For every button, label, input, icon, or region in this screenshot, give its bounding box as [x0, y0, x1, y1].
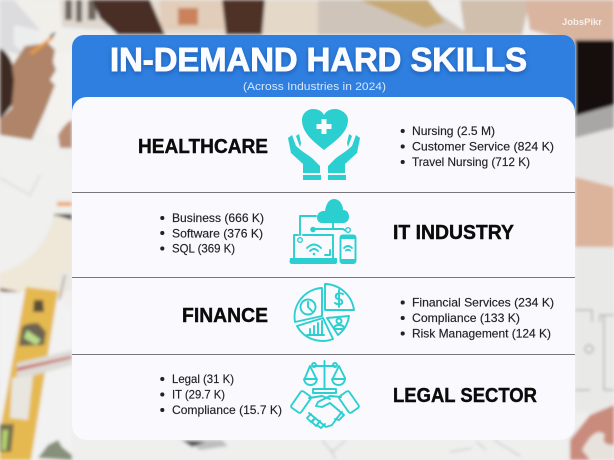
skills list: healthcare: Customer Service (824 K) — [412, 140, 554, 154]
skills list: finance — [401, 296, 554, 340]
row dividers — [72, 192, 575, 354]
skills list: healthcare: Nursing (2.5 M) — [412, 124, 495, 138]
icon: finance pie chart — [295, 284, 354, 341]
panel: white content card — [72, 97, 575, 440]
skills list: legal sector: Legal (31 K) — [172, 372, 234, 386]
skills list: IT industry: Business (666 K) — [172, 211, 264, 225]
icon: cloud network with laptop and phone — [290, 199, 356, 264]
skills list: finance: Risk Management (124 K) — [412, 326, 551, 340]
skills list: finance: Financial Services (234 K) — [412, 296, 554, 310]
panel: blue header — [72, 35, 575, 125]
skills list: IT industry — [160, 211, 264, 256]
title: IN-DEMAND HARD SKILLS — [110, 42, 527, 79]
skills list: healthcare: Travel Nursing (712 K) — [412, 155, 530, 169]
skills list: legal sector — [160, 372, 282, 417]
skills list: IT industry: Software (376 K) — [172, 226, 263, 240]
logo: JobsPikr: JobsPikr — [562, 17, 602, 28]
heading: healthcare: HEALTHCARE — [138, 136, 268, 158]
skills list: IT industry: SQL (369 K) — [172, 242, 235, 256]
heading: IT industry: IT INDUSTRY — [393, 222, 515, 244]
skills list: legal sector: Compliance (15.7 K) — [172, 403, 282, 417]
heading: finance: FINANCE — [182, 305, 268, 327]
heading: legal sector: LEGAL SECTOR — [393, 385, 538, 407]
icon: scales and handshake — [290, 361, 360, 428]
skills list: legal sector: IT (29.7 K) — [172, 388, 225, 402]
icon: heart in caring hands — [288, 109, 360, 180]
skills list: healthcare — [401, 124, 554, 169]
skills list: finance: Compliance (133 K) — [412, 311, 520, 325]
subtitle: (Across Industries in 2024) — [243, 81, 386, 93]
